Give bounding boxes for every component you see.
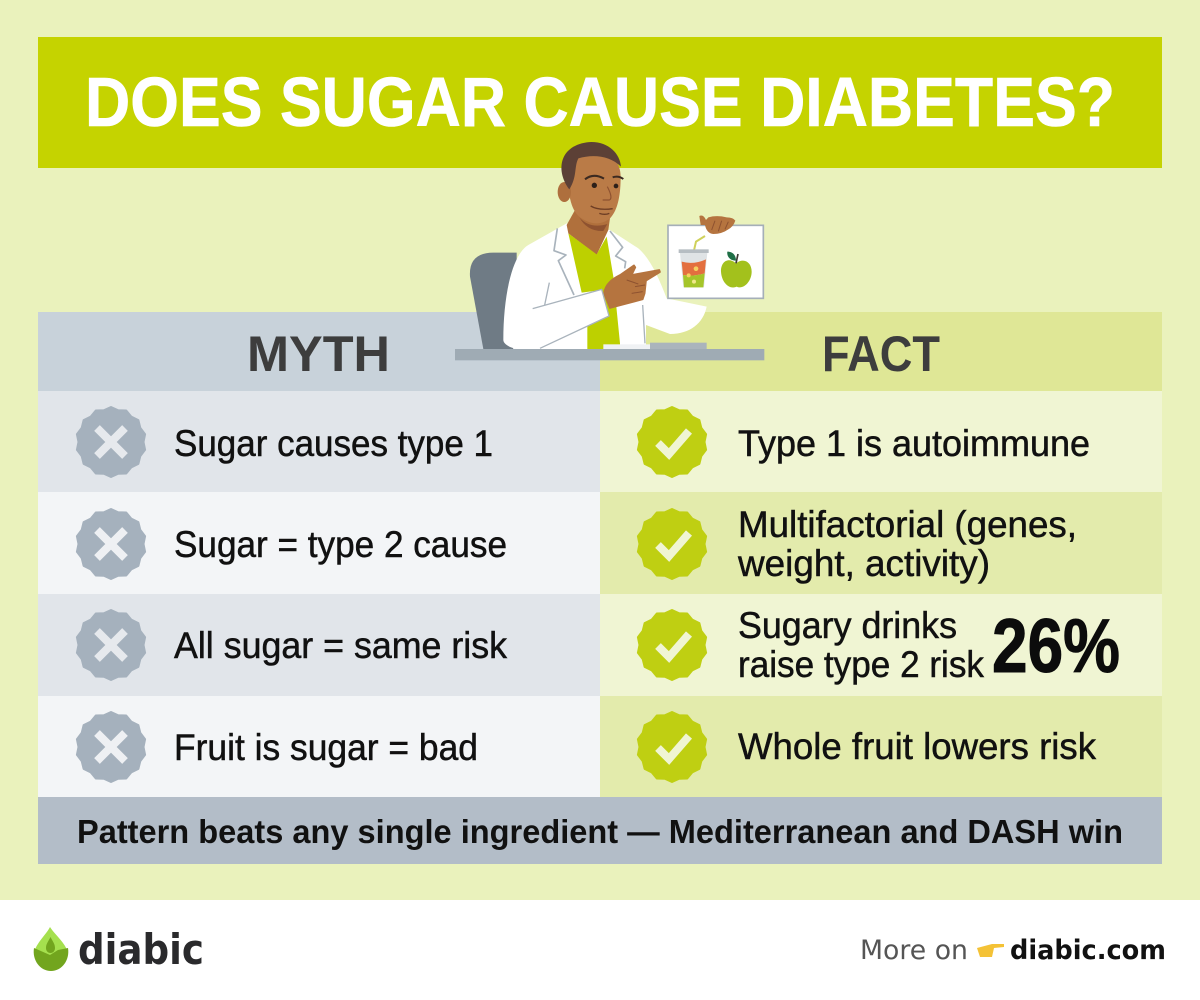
logo: [34, 925, 204, 974]
fact header: FACT: [822, 326, 940, 382]
pointing hand: [604, 265, 660, 308]
chair: [470, 253, 517, 349]
fact row 3: [600, 594, 1162, 696]
white coat: [503, 223, 707, 349]
fact row 1: [600, 391, 1162, 492]
more on link: diabic.com: [1010, 935, 1166, 966]
head: [567, 153, 621, 223]
myth row 3: [38, 594, 600, 696]
fact header: [600, 312, 1162, 391]
face details: [585, 176, 623, 214]
ear: [558, 182, 571, 202]
more on link: [860, 935, 1166, 966]
myth row 4: [38, 696, 600, 797]
logo: diabic: [78, 925, 204, 974]
holding hand: [699, 215, 735, 234]
fact row 2: Multifactorial (genes,: [738, 504, 1077, 545]
myth row 4: Fruit is sugar = bad: [174, 727, 478, 768]
fact row 2: [600, 492, 1162, 594]
myth header: MYTH: [247, 326, 390, 382]
26% statistic: 26%: [992, 604, 1120, 689]
footer: [0, 900, 1200, 1000]
card: [668, 215, 763, 298]
myth row 2: Sugar = type 2 cause: [174, 524, 507, 565]
fact row 3: Sugary drinks: [738, 605, 957, 646]
bottom takeaway bar: Pattern beats any single ingredient — Mediterranean and DASH win: [77, 813, 1123, 850]
icon: green apple: [721, 252, 752, 288]
neck: [567, 210, 611, 255]
myth header: [38, 312, 600, 391]
fact row 1: Type 1 is autoimmune: [738, 423, 1090, 464]
myth row 2: [38, 492, 600, 594]
shirt: [568, 233, 620, 349]
icon: drop: [34, 927, 68, 971]
fact row 3: raise type 2 risk: [738, 644, 984, 685]
icon: sugary drink: [679, 236, 709, 287]
bottom takeaway bar: [38, 797, 1162, 864]
more on link: More on: [860, 935, 968, 966]
panel: myth column: [38, 312, 600, 797]
icon: pointing hand: [977, 944, 1004, 957]
coat lapels: [554, 228, 626, 295]
panel: fact column: [600, 312, 1162, 797]
myth row 3: All sugar = same risk: [174, 625, 507, 666]
fact row 4: [600, 696, 1162, 797]
desk: [455, 343, 764, 360]
illustration: doctor at desk holding a card: [455, 142, 764, 360]
myth row 1: [38, 391, 600, 492]
title banner: [38, 37, 1162, 168]
myth row 1: Sugar causes type 1: [174, 423, 493, 464]
hair: [561, 142, 621, 189]
fact row 2: weight, activity): [737, 543, 990, 584]
fact row 4: Whole fruit lowers risk: [738, 726, 1096, 767]
sleeve cuff: [508, 289, 609, 349]
